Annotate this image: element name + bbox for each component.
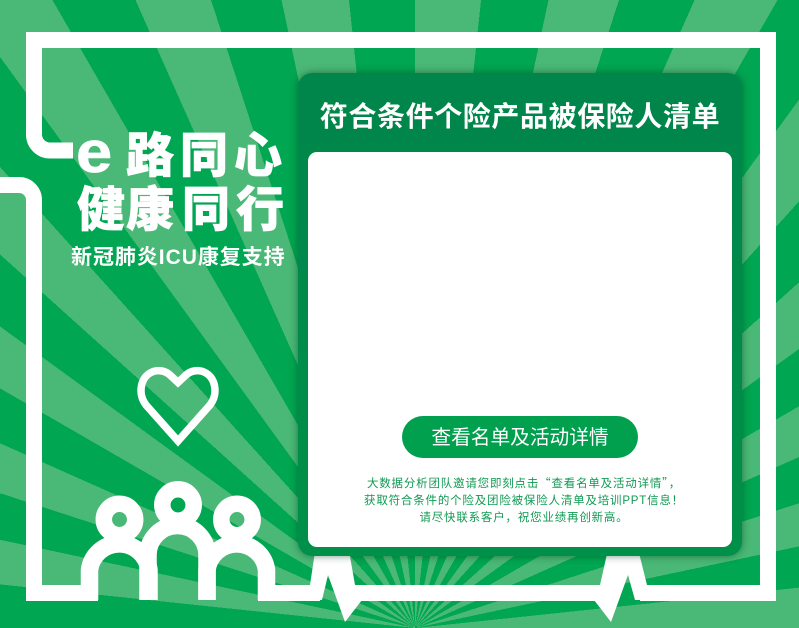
- description text: [364, 475, 684, 524]
- white content card: [308, 152, 732, 547]
- heading line 1: e: [76, 120, 112, 185]
- description text: 大数据分析团队邀请您即刻点击“查看名单及活动详情”，: [367, 475, 681, 491]
- heading line 2: 健康同行: [77, 184, 290, 237]
- heading line 1: 路同心: [126, 130, 288, 183]
- description text: 请尽快联系客户，祝您业绩再创新高。: [419, 512, 629, 524]
- description text: 获取符合条件的个险及团险被保险人清单及培训PPT信息！: [364, 495, 684, 507]
- button: 查看名单及活动详情: [431, 427, 609, 449]
- panel: insured list: [298, 73, 742, 556]
- button: [402, 416, 638, 458]
- heading line 1: [76, 120, 288, 185]
- panel title: 符合条件个险产品被保险人清单: [320, 101, 720, 132]
- subheading: 新冠肺炎ICU康复支持: [71, 246, 286, 269]
